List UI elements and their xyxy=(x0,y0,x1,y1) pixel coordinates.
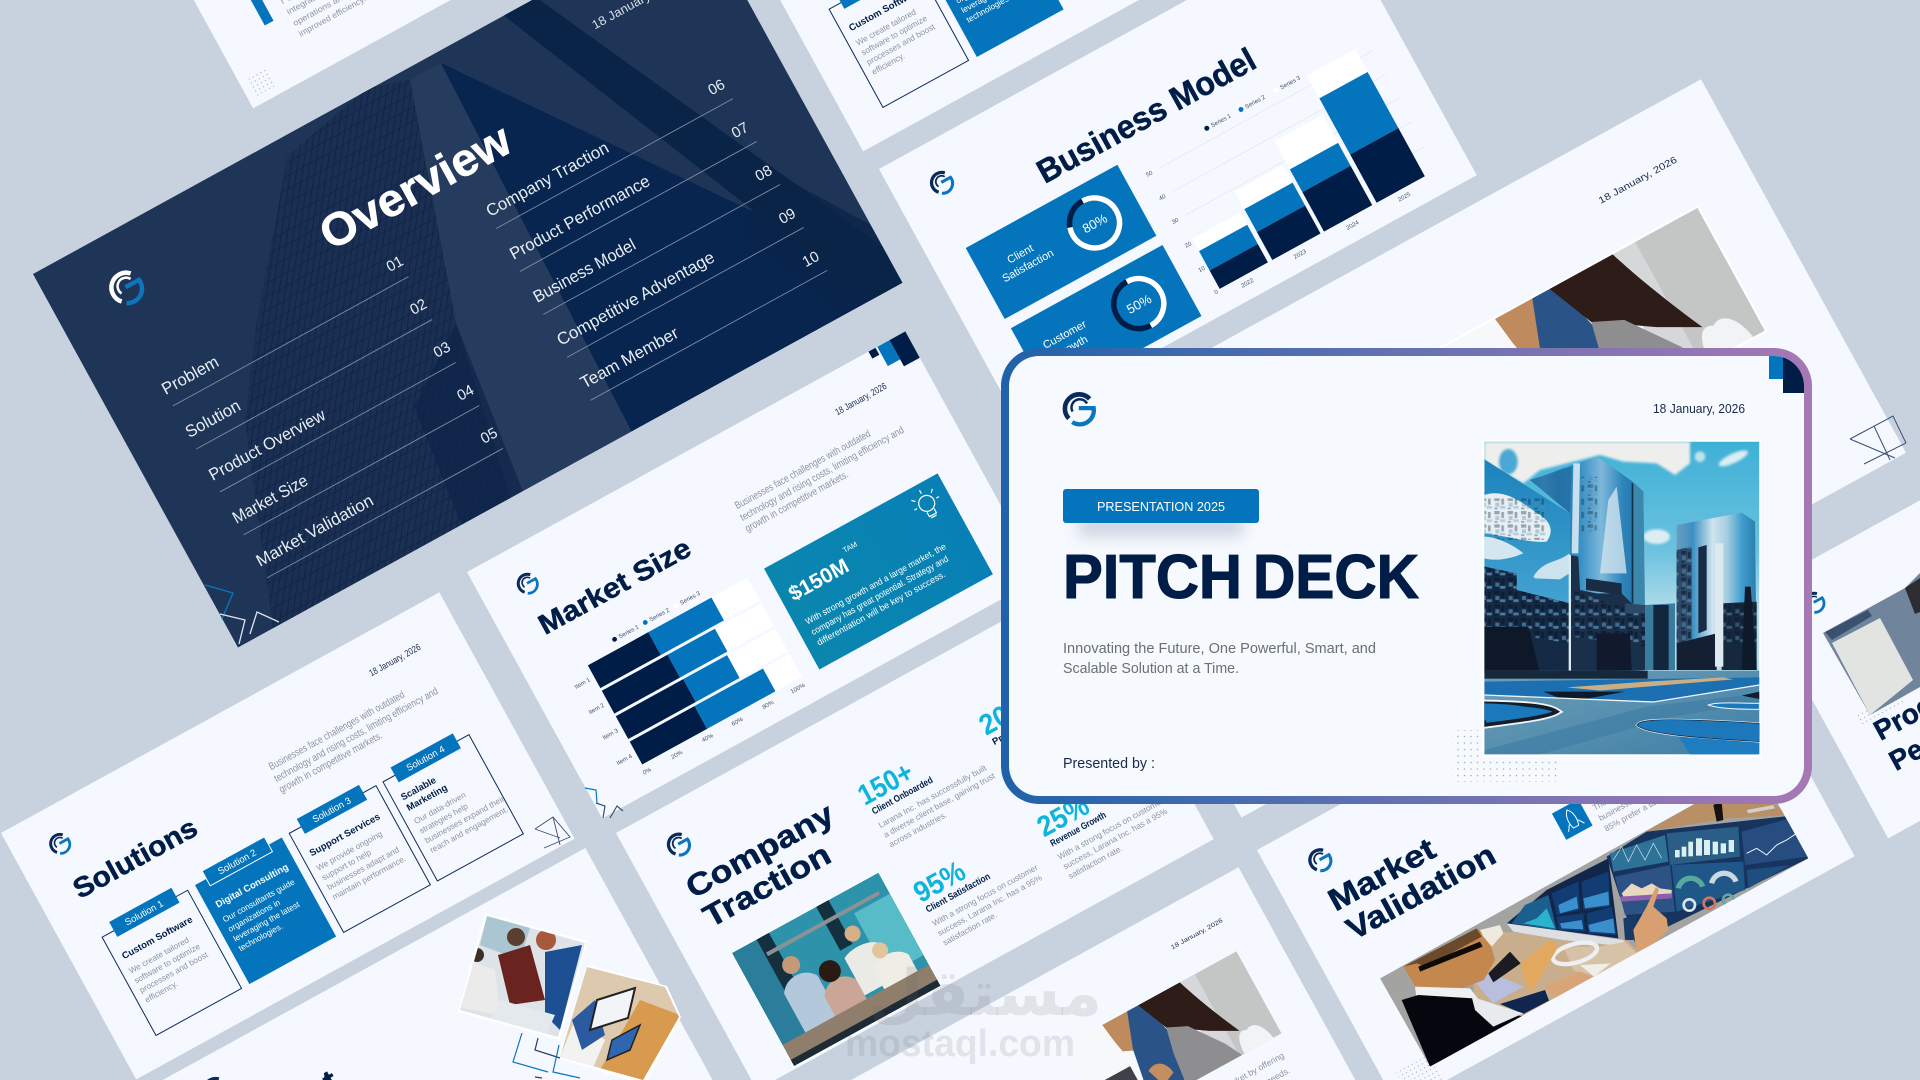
kpi card customer growth: Growth xyxy=(1053,334,1090,361)
panel: market size slide xyxy=(467,331,1041,818)
validation logo xyxy=(1306,846,1334,875)
panel: bottom woman slide xyxy=(851,868,1356,1080)
card solution 3: maintain performance. xyxy=(330,853,408,902)
overview list left xyxy=(158,251,505,578)
overview list right: Product Performance xyxy=(506,171,653,264)
stacked column chart: 2025 xyxy=(1397,191,1412,203)
business logo xyxy=(928,169,956,197)
photo: team around table xyxy=(731,871,942,1067)
stat: 25%: success, Larana Inc. has a 95% xyxy=(1061,806,1170,871)
panel: market validation slide xyxy=(1257,599,1855,1080)
main title: DECK xyxy=(1253,543,1419,612)
card solution 1: software to optimize xyxy=(132,941,202,985)
card solution 4: reach and engagement. xyxy=(428,804,510,855)
market size decoration xyxy=(585,788,623,818)
stat: 150+ xyxy=(853,722,1002,851)
date: 18 January, 2026 xyxy=(834,381,889,418)
validation text: businesses prefer custom tools; xyxy=(1597,758,1704,823)
plaza ground xyxy=(1484,671,1759,754)
stat: 95%: success, Larana Inc. has a 95% xyxy=(936,872,1044,938)
overview list right: Company Traction xyxy=(483,138,612,221)
card solution 2: Our consultants guide xyxy=(221,876,297,924)
stat: 25%: Revenue Growth xyxy=(1049,810,1108,849)
watermark xyxy=(845,957,1102,1065)
stat: 95%: Client Satisfaction xyxy=(924,871,993,915)
photo: woman at desk xyxy=(1102,952,1282,1080)
validation title: Market xyxy=(1322,831,1441,918)
photo: laptops on desk xyxy=(558,965,681,1080)
card solution 2: Digital Consulting xyxy=(214,862,291,911)
kpi card customer growth: Customer xyxy=(1041,318,1089,352)
card solution 2: leveraging the latest xyxy=(231,899,302,943)
traction title xyxy=(680,796,857,935)
overview list left: 03 xyxy=(431,339,453,362)
stat: 95% xyxy=(908,823,1050,948)
stat: 20% xyxy=(974,678,1059,749)
TAM card: $150M xyxy=(785,555,853,606)
overview list right: 08 xyxy=(752,162,775,185)
horizontal stacked chart: Series 2 xyxy=(649,607,671,624)
stat: 25%: satisfaction rate. xyxy=(1066,843,1124,881)
card solution 2: organizations in xyxy=(226,897,282,934)
horizontal stacked chart: Series 3 xyxy=(679,591,702,607)
main title xyxy=(1063,543,1419,612)
photo: woman at desk xyxy=(1495,208,1765,348)
panel: solutions slide (top clone): software to optimize xyxy=(859,13,929,57)
panel: team photo slide xyxy=(147,848,721,1080)
panel: overview slide xyxy=(31,0,902,647)
stacked column chart xyxy=(1139,38,1444,304)
photo: product boxes xyxy=(1823,573,1920,715)
button shadow xyxy=(1078,515,1244,537)
description: technology and rising costs, limiting efficiency and xyxy=(273,686,440,785)
overview list left: Product Overview xyxy=(206,405,329,485)
stat: 150+: Client Onboarded xyxy=(870,775,935,817)
description: technology and rising costs, limiting efficiency and xyxy=(739,425,906,524)
panel: front pitch deck slide xyxy=(1001,348,1812,804)
card solution 3 xyxy=(285,778,430,932)
hand and pointing finger xyxy=(1633,887,1668,952)
horizontal stacked chart: 60% xyxy=(731,716,745,728)
icon: lightbulb xyxy=(907,483,946,523)
validation text: The research shows that many xyxy=(1591,749,1696,812)
market title: Market Size xyxy=(533,532,696,641)
photo: dashboards and analyst xyxy=(1380,804,1808,1066)
panel: solutions slide (top clone): processes and boost xyxy=(865,21,937,67)
overview list right: Competitive Adventage xyxy=(554,248,718,349)
TAM card: differentiation will be key to success. xyxy=(815,569,947,648)
traction title: Traction xyxy=(697,836,837,934)
overview corner decoration xyxy=(205,585,279,644)
card solution 4: Scalable xyxy=(399,775,438,803)
presentation tag: PRESENTATION 2025 xyxy=(1097,499,1225,514)
panel: company traction slide xyxy=(616,582,1214,1080)
dots xyxy=(1396,1053,1445,1080)
horizontal stacked chart: 0% xyxy=(642,767,653,777)
stat: 20%: 20% xyxy=(974,688,1037,742)
dots xyxy=(1855,692,1906,728)
traction title: Company xyxy=(680,796,840,905)
analyst xyxy=(1473,972,1523,1003)
horizontal stacked chart: Series 1 xyxy=(618,624,641,640)
stacked column chart: 2023 xyxy=(1293,249,1308,261)
date: 18 January, 2026 xyxy=(368,642,423,679)
card solution 2: technologies. xyxy=(237,921,284,953)
overview list left: 02 xyxy=(407,296,430,319)
TAM card: TAM xyxy=(841,540,859,555)
stacked column chart: 2024 xyxy=(1346,220,1361,232)
card solution 3: Solution 3 xyxy=(311,795,353,825)
subtitle: Scalable Solution at a Time. xyxy=(1063,660,1239,677)
stacked column chart: Series 1 xyxy=(1210,113,1233,129)
horizontal stacked chart: 40% xyxy=(701,733,715,744)
dots xyxy=(1452,730,1558,782)
monitor right xyxy=(1607,816,1808,943)
card solution 3: Support Services xyxy=(308,811,382,859)
overview logo xyxy=(106,267,147,309)
card solution 2: Solution 2 xyxy=(216,847,258,877)
validation title: Validation xyxy=(1340,837,1502,947)
right tower xyxy=(1677,513,1757,670)
slide decoration lines xyxy=(1850,416,1906,464)
validation text: 85% prefer a tailored solution. xyxy=(1602,772,1704,833)
team slide logo xyxy=(200,1075,231,1080)
icon: rocket xyxy=(1552,799,1593,840)
stacked column chart: 30 xyxy=(1171,217,1181,226)
card solution 4: businesses expand their xyxy=(423,793,506,845)
horizontal stacked chart: Item 4 xyxy=(616,753,634,767)
presented by: Presented by : xyxy=(1063,755,1155,772)
description: growth in competitive markets. xyxy=(744,469,851,535)
product title xyxy=(1868,637,1920,777)
business title: Business Model xyxy=(1030,40,1262,190)
stat: 150+: across industries. xyxy=(887,809,948,849)
stat: 25%: With a strong focus on customer xyxy=(1056,795,1165,862)
horizontal stacked chart: 20% xyxy=(671,750,685,761)
kpi card customer growth xyxy=(1011,245,1201,399)
overview list left: Market Size xyxy=(229,471,311,527)
panel: product performance slide xyxy=(1753,351,1920,838)
horizontal stacked chart xyxy=(563,567,808,785)
presentation tag xyxy=(1063,489,1259,523)
horizontal stacked chart: Item 1 xyxy=(574,677,592,691)
overview list left: Problem xyxy=(158,352,222,399)
main title: PITCH xyxy=(1063,543,1242,612)
TAM card: With strong growth and a large market, the xyxy=(804,541,948,626)
card solution 3: support to help xyxy=(320,847,373,882)
small diamond xyxy=(1006,748,1016,772)
photo: glass towers xyxy=(1484,442,1759,754)
TAM card xyxy=(764,473,993,669)
card solution 1: We create tailored xyxy=(127,934,191,976)
overview list right xyxy=(483,74,827,400)
solutions decoration xyxy=(535,817,570,848)
front date: 18 January, 2026 xyxy=(1653,401,1745,416)
corner accent xyxy=(1769,356,1804,393)
central tower xyxy=(1530,457,1645,673)
card solution 1: processes and boost xyxy=(138,949,210,995)
market logo xyxy=(515,571,541,597)
overview list right: 09 xyxy=(776,205,799,228)
card solution 4: Our data-driven xyxy=(412,789,468,826)
kpi card client satisfaction: Client xyxy=(1005,242,1036,266)
kpi card client satisfaction xyxy=(966,165,1156,319)
kpi card client satisfaction: Satisfaction xyxy=(1000,247,1056,285)
overview list right: 07 xyxy=(729,119,752,142)
panel: solutions slide (top clone) xyxy=(728,0,1302,151)
date: 18 January, 2026 xyxy=(1170,917,1225,951)
stat: 25%: 25% xyxy=(1032,790,1095,844)
overview list right: 06 xyxy=(705,76,728,99)
watermark: مستقل xyxy=(868,957,1102,1031)
watermark: mostaql.com xyxy=(845,1023,1075,1065)
card solution 1: Custom Software xyxy=(120,914,195,962)
middle buildings xyxy=(1645,603,1675,670)
card solution 3: We provide ongoing xyxy=(315,828,384,873)
overview list left: Market Validation xyxy=(253,491,377,570)
product logo xyxy=(1802,590,1827,616)
card solution 1: Solution 1 xyxy=(123,898,166,928)
subtitle xyxy=(1063,640,1376,677)
stacked column chart: 20 xyxy=(1184,241,1194,250)
card solution 1 xyxy=(97,881,242,1035)
panel: top sliver slide xyxy=(118,0,692,108)
description: Businesses face challenges with outdated xyxy=(733,429,873,512)
photo frame xyxy=(1482,440,1761,757)
stacked column chart: Series 3 xyxy=(1280,75,1302,91)
validation text xyxy=(1591,748,1710,833)
card solution 1: efficiency. xyxy=(143,978,179,1005)
card solution 4: strategies help xyxy=(417,801,470,836)
panel: business model slide xyxy=(879,0,1477,426)
overview title: Overview xyxy=(310,113,520,260)
overview list right: 10 xyxy=(800,248,822,271)
stacked column chart: 0 xyxy=(1214,289,1220,296)
panel: solutions slide xyxy=(1,592,575,1079)
stat: 25% xyxy=(1032,757,1176,882)
validation title xyxy=(1322,807,1502,948)
stat: 95%: With a strong focus on customer xyxy=(930,862,1040,928)
horizontal stacked chart: Item 3 xyxy=(602,728,620,742)
front logo xyxy=(1065,394,1094,424)
photo: meeting team xyxy=(458,913,587,1040)
blue outline accents xyxy=(513,1033,580,1078)
stacked column chart: 2022 xyxy=(1240,278,1256,290)
overview list left: 01 xyxy=(384,253,406,276)
overview list right: Team Member xyxy=(577,323,682,392)
stat: 95%: 95% xyxy=(908,855,971,909)
monitor left xyxy=(1507,858,1618,938)
overview background building xyxy=(246,0,902,628)
solutions logo xyxy=(47,831,73,857)
card solution 4 xyxy=(379,727,524,881)
kpi card client satisfaction: 80% xyxy=(1080,210,1110,236)
overview list left: 04 xyxy=(454,382,477,404)
kpi card customer growth: 50% xyxy=(1124,291,1154,317)
date: 18 January, 2026 xyxy=(1597,155,1679,207)
stat: 150+: Larana Inc. has successfully built xyxy=(876,762,989,830)
stat: 150+: a diverse client base, gaining trust xyxy=(882,770,997,840)
corner accents xyxy=(869,331,920,378)
stat: 20%: Product Growth xyxy=(991,703,1059,748)
left building xyxy=(1484,459,1570,673)
panel: solutions slide (top clone): We create tailored xyxy=(854,6,918,48)
solutions title: Solutions xyxy=(68,812,203,905)
card solution 3: businesses adapt and xyxy=(325,844,401,892)
overview list left: 05 xyxy=(478,425,501,447)
horizontal stacked chart: Item 2 xyxy=(588,703,606,716)
TAM card: company has great potential. Strategy and xyxy=(809,554,950,637)
card solution 4: Solution 4 xyxy=(405,744,447,774)
stat: 150+: 150+ xyxy=(853,756,919,812)
description: Businesses face challenges with outdated xyxy=(267,690,407,773)
card solution 2 xyxy=(191,830,336,984)
stat: 95%: satisfaction rate. xyxy=(941,910,999,947)
stacked column chart: Series 2 xyxy=(1244,94,1267,111)
stacked column chart: 40 xyxy=(1158,194,1168,202)
card solution 4: Marketing xyxy=(405,782,450,814)
subtitle: Innovating the Future, One Powerful, Smart, and xyxy=(1063,640,1376,657)
horizontal stacked chart: 80% xyxy=(762,700,776,711)
panel: solutions slide (top clone): efficiency. xyxy=(870,50,906,77)
overview list right: Business Model xyxy=(530,235,639,307)
traction logo xyxy=(665,830,693,859)
description: growth in competitive markets. xyxy=(278,730,385,796)
horizontal stacked chart: 100% xyxy=(790,682,807,695)
stacked column chart: 50 xyxy=(1145,170,1155,179)
stacked column chart: 10 xyxy=(1198,265,1207,274)
panel: woman photo slide (large) xyxy=(1212,79,1906,818)
overview list left: Solution xyxy=(182,396,244,442)
